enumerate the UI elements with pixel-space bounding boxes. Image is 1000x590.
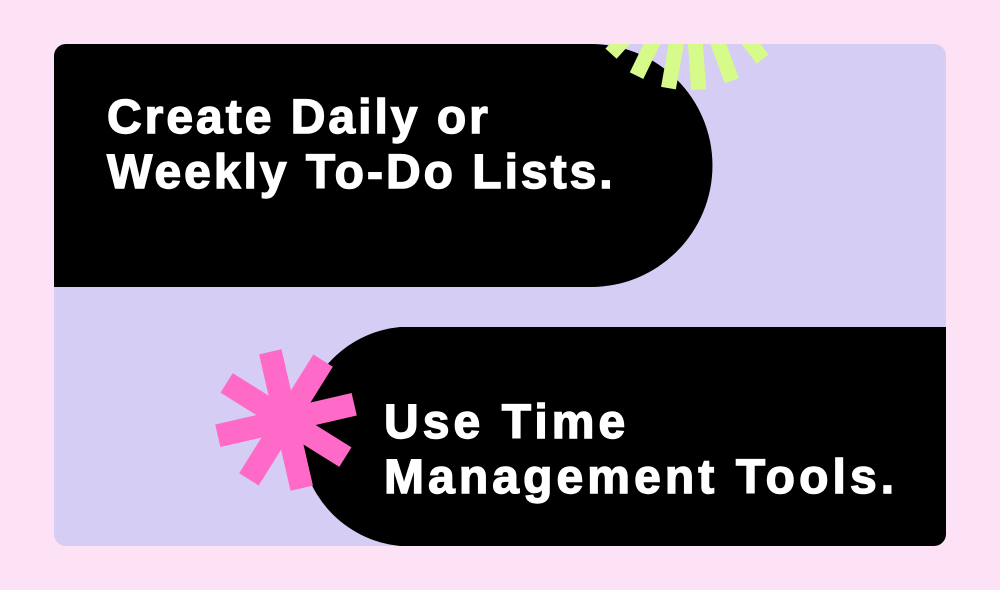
icon: green starburst xyxy=(611,18,763,90)
card xyxy=(54,44,946,546)
bottom black panel xyxy=(300,327,946,546)
heading: top: Weekly To-Do Lists. xyxy=(107,146,616,199)
heading: bottom: Management Tools. xyxy=(384,451,898,504)
top black panel xyxy=(54,44,712,287)
icon: pink asterisk xyxy=(202,336,370,504)
heading: bottom xyxy=(384,396,898,504)
heading: top: Create Daily or xyxy=(107,91,491,144)
heading: bottom: Use Time xyxy=(384,396,629,449)
heading: top xyxy=(106,91,616,199)
